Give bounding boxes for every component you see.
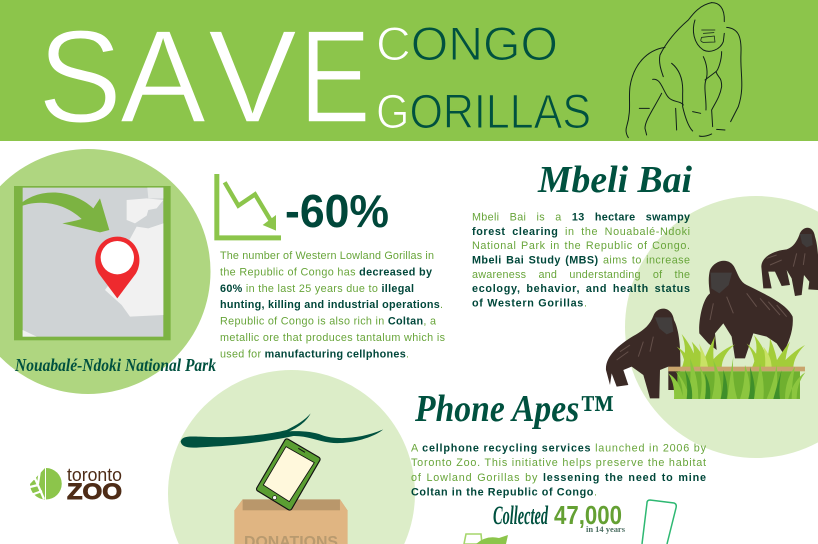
logo mark	[30, 468, 62, 500]
text block: Mbeli Bai: ecology, behavior, and health status	[472, 283, 690, 295]
text block: population decline: 60% in the last 25 years due to illegal	[220, 283, 414, 295]
heading: Mbeli Bai: Mbeli Bai	[537, 159, 692, 201]
illustration: tablet into donation box	[181, 413, 383, 544]
icon: phone outline	[642, 500, 676, 544]
text block: population decline: Republic of Congo is also rich in Coltan, a	[220, 316, 436, 328]
text block: population decline	[220, 250, 446, 360]
gorilla: left	[606, 309, 680, 398]
title: SAVE: V	[208, 3, 297, 150]
text block: Mbeli Bai: National Park in the Republic of Congo.	[472, 240, 690, 252]
text block: Phone Apes	[411, 442, 707, 498]
branch	[181, 413, 383, 448]
text block: Mbeli Bai: Mbeli Bai Study (MBS) aims to increase	[472, 254, 690, 266]
text block: Mbeli Bai: Mbeli Bai is a 13 hectare swampy	[472, 212, 690, 224]
panel: map circle	[0, 149, 216, 394]
stat: collected 47,000: Collected	[493, 501, 549, 530]
text block: Phone Apes: of Lowland Gorillas by lessening the need to mine	[411, 472, 706, 484]
icon: tablet	[259, 441, 318, 508]
icon: curved arrow	[16, 192, 109, 232]
text block: Phone Apes: Coltan in the Republic of Congo.	[411, 486, 597, 498]
text block: population decline: The number of Western Lowland Gorillas in	[220, 250, 434, 262]
illustration: gorillas in grass	[606, 228, 818, 399]
text block: population decline: the Republic of Congo has decreased by	[220, 266, 432, 278]
text block: Phone Apes: A cellphone recycling services launched in 2006 by	[411, 442, 707, 454]
text block: Phone Apes: Toronto Zoo. This initiative helps preserve the habitat	[411, 457, 706, 469]
stat: minus 60 percent: -60%	[285, 185, 389, 237]
text block: Mbeli Bai: forest clearing in the Nouabalé-Ndoki	[472, 226, 690, 238]
stat: collected 47,000: 47,000	[554, 500, 622, 530]
text block: population decline: used for manufacturing cellphones.	[220, 348, 409, 360]
logo: Toronto Zoo	[30, 465, 122, 504]
stat: collected 47,000	[493, 500, 626, 534]
text block: population decline: metallic ore that produces tantalum which is	[220, 332, 446, 344]
icon: location pin	[95, 237, 139, 298]
gorilla: right	[761, 228, 818, 296]
logo: Toronto Zoo: ZOO	[67, 479, 122, 504]
text block: Mbeli Bai: awareness and understanding of the	[472, 269, 690, 281]
map caption: Nouabalé-Ndoki National Park	[14, 355, 216, 375]
gorilla: centre	[699, 261, 793, 358]
grass clump	[668, 334, 805, 399]
panel: gorilla circle	[625, 196, 818, 458]
title: SAVE: A	[120, 3, 206, 150]
stat: collected 47,000: in 14 years	[586, 524, 626, 534]
title: Gorillas: GORILLAS	[376, 86, 591, 139]
title: Congo: CONGO	[376, 17, 558, 70]
header banner	[0, 0, 818, 141]
heading: Phone Apes: Phone Apes™	[414, 388, 613, 430]
map frame	[14, 186, 171, 340]
text block: Mbeli Bai	[472, 212, 690, 310]
text block: Mbeli Bai: of Western Gorillas.	[472, 298, 587, 310]
text block: population decline: hunting, killing and industrial operations.	[220, 299, 443, 311]
logo wordmark: toronto	[67, 465, 122, 485]
title: SAVE	[38, 3, 370, 150]
panel: donation circle	[168, 370, 415, 544]
icon: declining chart	[214, 174, 281, 240]
icon: recycled papers	[464, 534, 508, 544]
title: SAVE: E	[300, 3, 370, 150]
box	[234, 499, 348, 544]
title: SAVE: S	[38, 3, 122, 150]
icon: gorilla line drawing	[626, 3, 742, 138]
